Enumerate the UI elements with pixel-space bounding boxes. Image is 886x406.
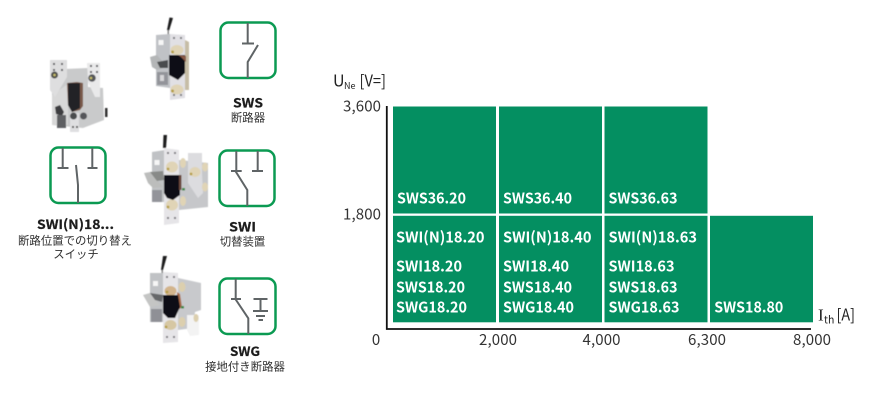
axis title: UNe [V=]: U bbox=[333, 68, 345, 92]
labels: 4,000 column: SWI18.40 bbox=[503, 256, 569, 276]
photo: SWG device bbox=[143, 256, 201, 343]
label: SWS: 断路器 bbox=[231, 110, 266, 124]
axis title: Ith [A]: [A] bbox=[836, 302, 855, 326]
x axis labels: 4,000 bbox=[582, 329, 620, 350]
photo: SWI(N) device bbox=[50, 60, 108, 132]
label: SWS: SWS bbox=[233, 93, 263, 112]
icon: SWI(N) symbol bbox=[50, 148, 106, 203]
label: SWI(N)18...: スイッチ bbox=[53, 248, 99, 261]
labels: 4,000 column: SWS36.40 bbox=[503, 188, 572, 208]
labels: 2,000 column: SWI18.20 bbox=[396, 256, 462, 276]
axis title: UNe [V=]: Ne bbox=[344, 79, 356, 92]
x axis labels bbox=[372, 329, 831, 350]
labels: 4,000 column: SWG18.40 bbox=[503, 296, 574, 317]
axes bbox=[387, 106, 811, 329]
axis title: Ith [A]: th bbox=[824, 312, 834, 328]
labels: 2,000 column bbox=[396, 188, 485, 317]
chart: voltage vs current bbox=[333, 68, 855, 350]
label: SWI(N)18... bbox=[18, 214, 132, 261]
labels: 6,300 column: SWI18.63 bbox=[608, 256, 674, 276]
label: SWG bbox=[205, 341, 285, 374]
x axis labels: 2,000 bbox=[479, 329, 517, 350]
label: SWI bbox=[220, 216, 265, 248]
x axis labels: 8,000 bbox=[793, 329, 831, 350]
axis title: UNe [V=]: [V=] bbox=[360, 68, 386, 92]
labels: 6,300 column: SWS36.63 bbox=[608, 188, 678, 208]
label: SWI: 切替装置 bbox=[220, 234, 265, 248]
labels: 6,300 column: SWI(N)18.63 bbox=[608, 226, 697, 248]
label: SWG: 接地付き断路器 bbox=[205, 360, 285, 374]
axis title: UNe [V=] bbox=[333, 68, 386, 92]
cells: lower row bbox=[393, 216, 813, 322]
labels: 6,300 column: SWS18.63 bbox=[608, 276, 678, 297]
labels: 4,000 column: SWI(N)18.40 bbox=[503, 226, 592, 248]
labels: 2,000 column: SWS36.20 bbox=[397, 188, 466, 208]
axis title: Ith [A]: I bbox=[818, 306, 824, 324]
labels: 4,000 column: SWS18.40 bbox=[503, 276, 572, 297]
label: SWS bbox=[231, 93, 266, 124]
icon: SWG symbol bbox=[220, 278, 276, 334]
cells: upper row bbox=[393, 106, 708, 214]
photo: SWI device bbox=[144, 135, 208, 225]
y axis labels: 1,800 bbox=[343, 203, 381, 224]
label: 8,000 column: SWS18.80 bbox=[714, 296, 783, 317]
labels: 4,000 column bbox=[503, 188, 592, 317]
label: SWI: SWI bbox=[229, 216, 256, 236]
label: SWI(N)18...: SWI(N)18... bbox=[37, 214, 114, 233]
label: SWI(N)18...: 断路位置での切り替え bbox=[18, 234, 132, 248]
labels: 6,300 column: SWG18.63 bbox=[608, 296, 680, 317]
axis title: Ith [A] bbox=[818, 302, 855, 328]
labels: 2,000 column: SWG18.20 bbox=[396, 296, 467, 317]
icon: SWI symbol bbox=[220, 150, 274, 206]
labels: 2,000 column: SWS18.20 bbox=[396, 276, 465, 297]
labels: 2,000 column: SWI(N)18.20 bbox=[396, 226, 485, 248]
photo: SWS device bbox=[150, 18, 189, 100]
label: SWG: SWG bbox=[230, 341, 260, 360]
x axis labels: 0 bbox=[372, 329, 380, 350]
y axis labels: 3,600 bbox=[343, 96, 381, 117]
icon: SWS symbol bbox=[220, 22, 276, 78]
labels: 6,300 column bbox=[608, 188, 697, 317]
y axis labels bbox=[343, 96, 381, 224]
x axis labels: 6,300 bbox=[688, 329, 726, 350]
